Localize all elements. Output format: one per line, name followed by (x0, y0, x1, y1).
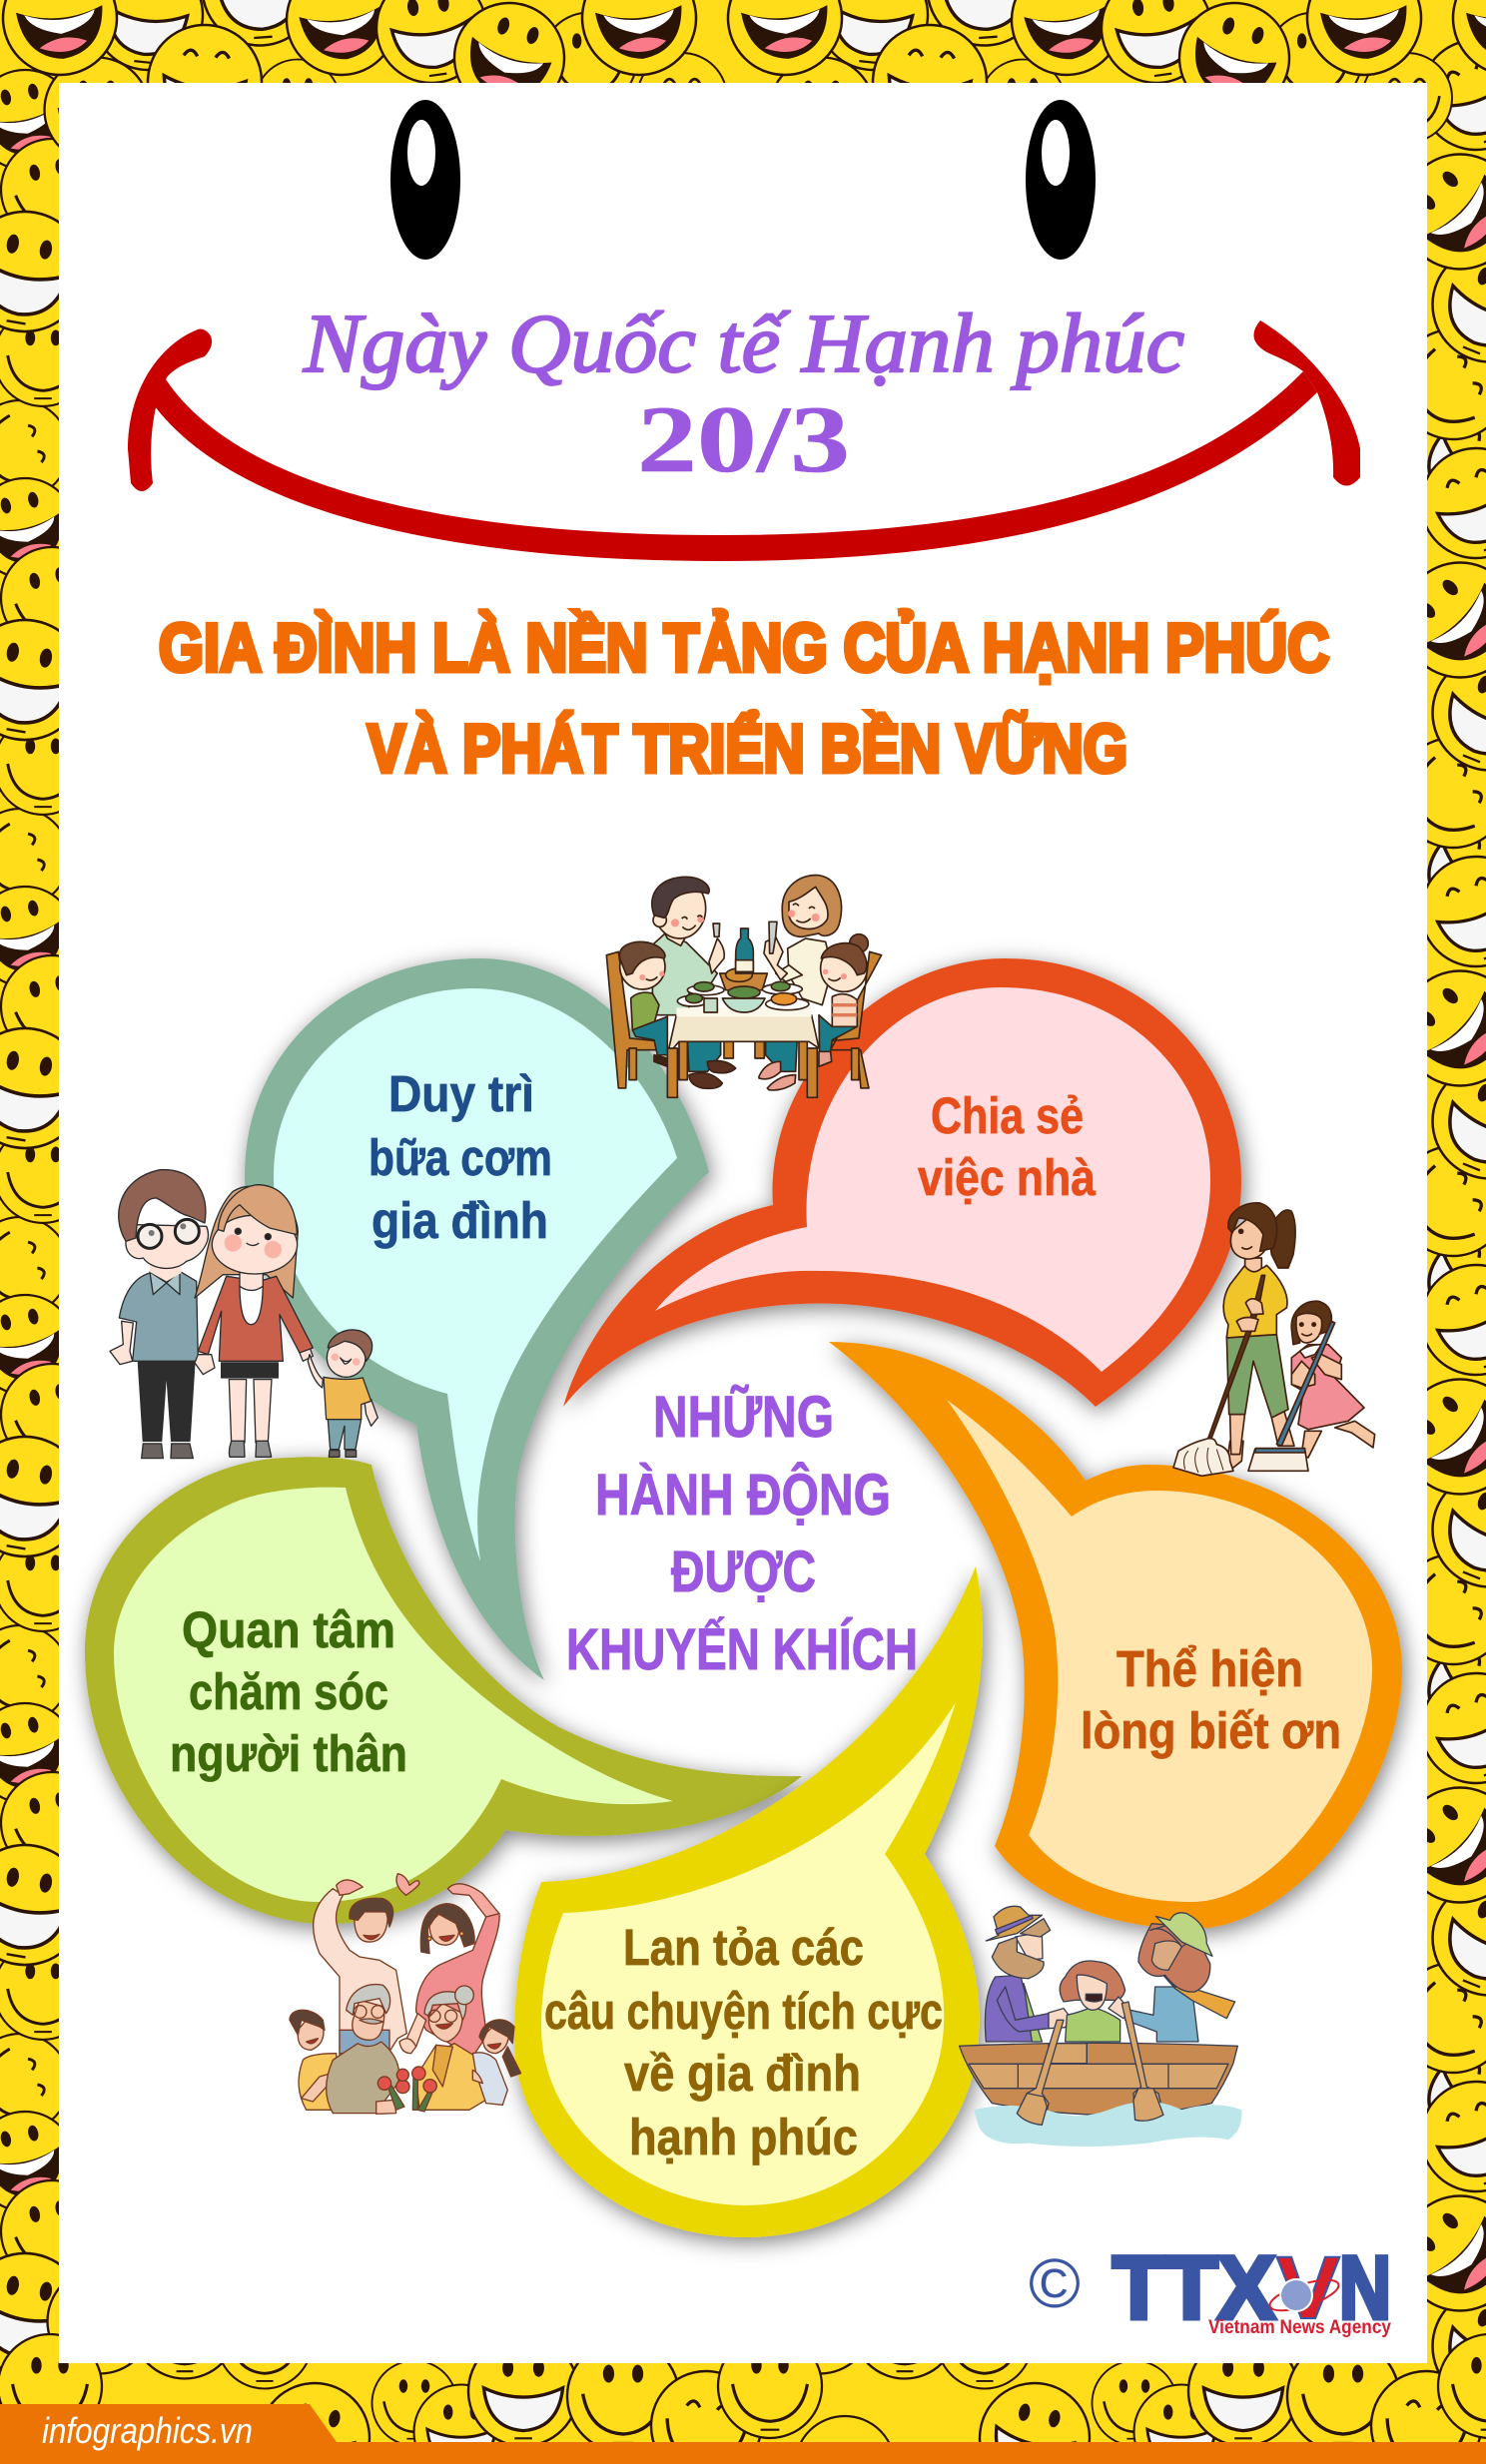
panel: red speech bubble (563, 958, 1241, 1407)
footer bar (0, 2404, 1486, 2464)
title: Ngày Quốc tế Hạnh phúc (303, 298, 1184, 390)
center text: encouraged actions: KHUYẾN KHÍCH (566, 1617, 918, 1682)
illustration: three-generation family (290, 1874, 521, 2114)
title: 20/3 (637, 386, 850, 492)
title (303, 298, 1184, 492)
text: lan toa: hạnh phúc (629, 2109, 858, 2165)
panel: yellow speech bubble (514, 1566, 983, 2237)
text: quan tam: Quan tâm (182, 1601, 395, 1658)
logo: TTXVN Vietnam News Agency: V (1276, 2237, 1340, 2337)
logo: TTXVN Vietnam News Agency: N (1339, 2237, 1391, 2337)
text: lan toa: về gia đình (624, 2045, 861, 2102)
center text: encouraged actions: NHỮNG (653, 1385, 834, 1450)
illustration: family at dinner table (606, 876, 882, 1097)
text: lan toa: Lan tỏa các (623, 1919, 864, 1976)
table with food (667, 1015, 819, 1055)
center text: encouraged actions: HÀNH ĐỘNG (595, 1463, 891, 1528)
girl (832, 994, 857, 1026)
boy (631, 992, 659, 1030)
text: quan tam (170, 1601, 407, 1782)
center text: encouraged actions: ĐƯỢC (671, 1540, 816, 1604)
heading: VÀ PHÁT TRIỂN BỀN VỮNG (368, 710, 1127, 787)
text: lan toa (544, 1919, 943, 2165)
text: chia se: Chia sẻ (931, 1087, 1084, 1144)
text: duy tri: Duy trì (388, 1065, 534, 1122)
icon: red smile mouth (128, 320, 1360, 561)
illustration: mother and daughter cleaning (1173, 1203, 1375, 1476)
text: chia se (918, 1087, 1097, 1206)
logo: TTXVN Vietnam News Agency: Vietnam News Agency (1208, 2317, 1391, 2338)
text: the hien: Thể hiện (1116, 1640, 1303, 1697)
text: quan tam: người thân (170, 1725, 407, 1782)
panel: teal speech bubble (245, 958, 709, 1680)
icon: right eye (1026, 100, 1096, 260)
heading (159, 609, 1329, 787)
panel: green speech bubble (85, 1457, 802, 1924)
logo: TTXVN Vietnam News Agency: TTX (1113, 2237, 1275, 2337)
text: the hien (1081, 1640, 1341, 1759)
icon: left eye (390, 100, 460, 260)
footer text: infographics.vn: infographics.vn (42, 2410, 253, 2451)
illustration: parents and child (110, 1170, 377, 1459)
text: duy tri (369, 1065, 552, 1249)
center text: encouraged actions (566, 1385, 918, 1682)
panel: orange speech bubble (829, 1342, 1402, 1929)
text: duy tri: bữa cơm (369, 1129, 552, 1186)
text: quan tam: chăm sóc (189, 1663, 388, 1720)
logo: copyright symbol: © (1029, 2244, 1081, 2322)
text: duy tri: gia đình (372, 1192, 548, 1249)
text: chia se: việc nhà (918, 1149, 1097, 1206)
logo: TTXVN Vietnam News Agency (1113, 2237, 1391, 2338)
text: the hien: lòng biết ơn (1081, 1702, 1341, 1759)
text: lan toa: câu chuyện tích cực (544, 1983, 943, 2040)
illustration: family in a rowing boat (960, 1906, 1241, 2147)
